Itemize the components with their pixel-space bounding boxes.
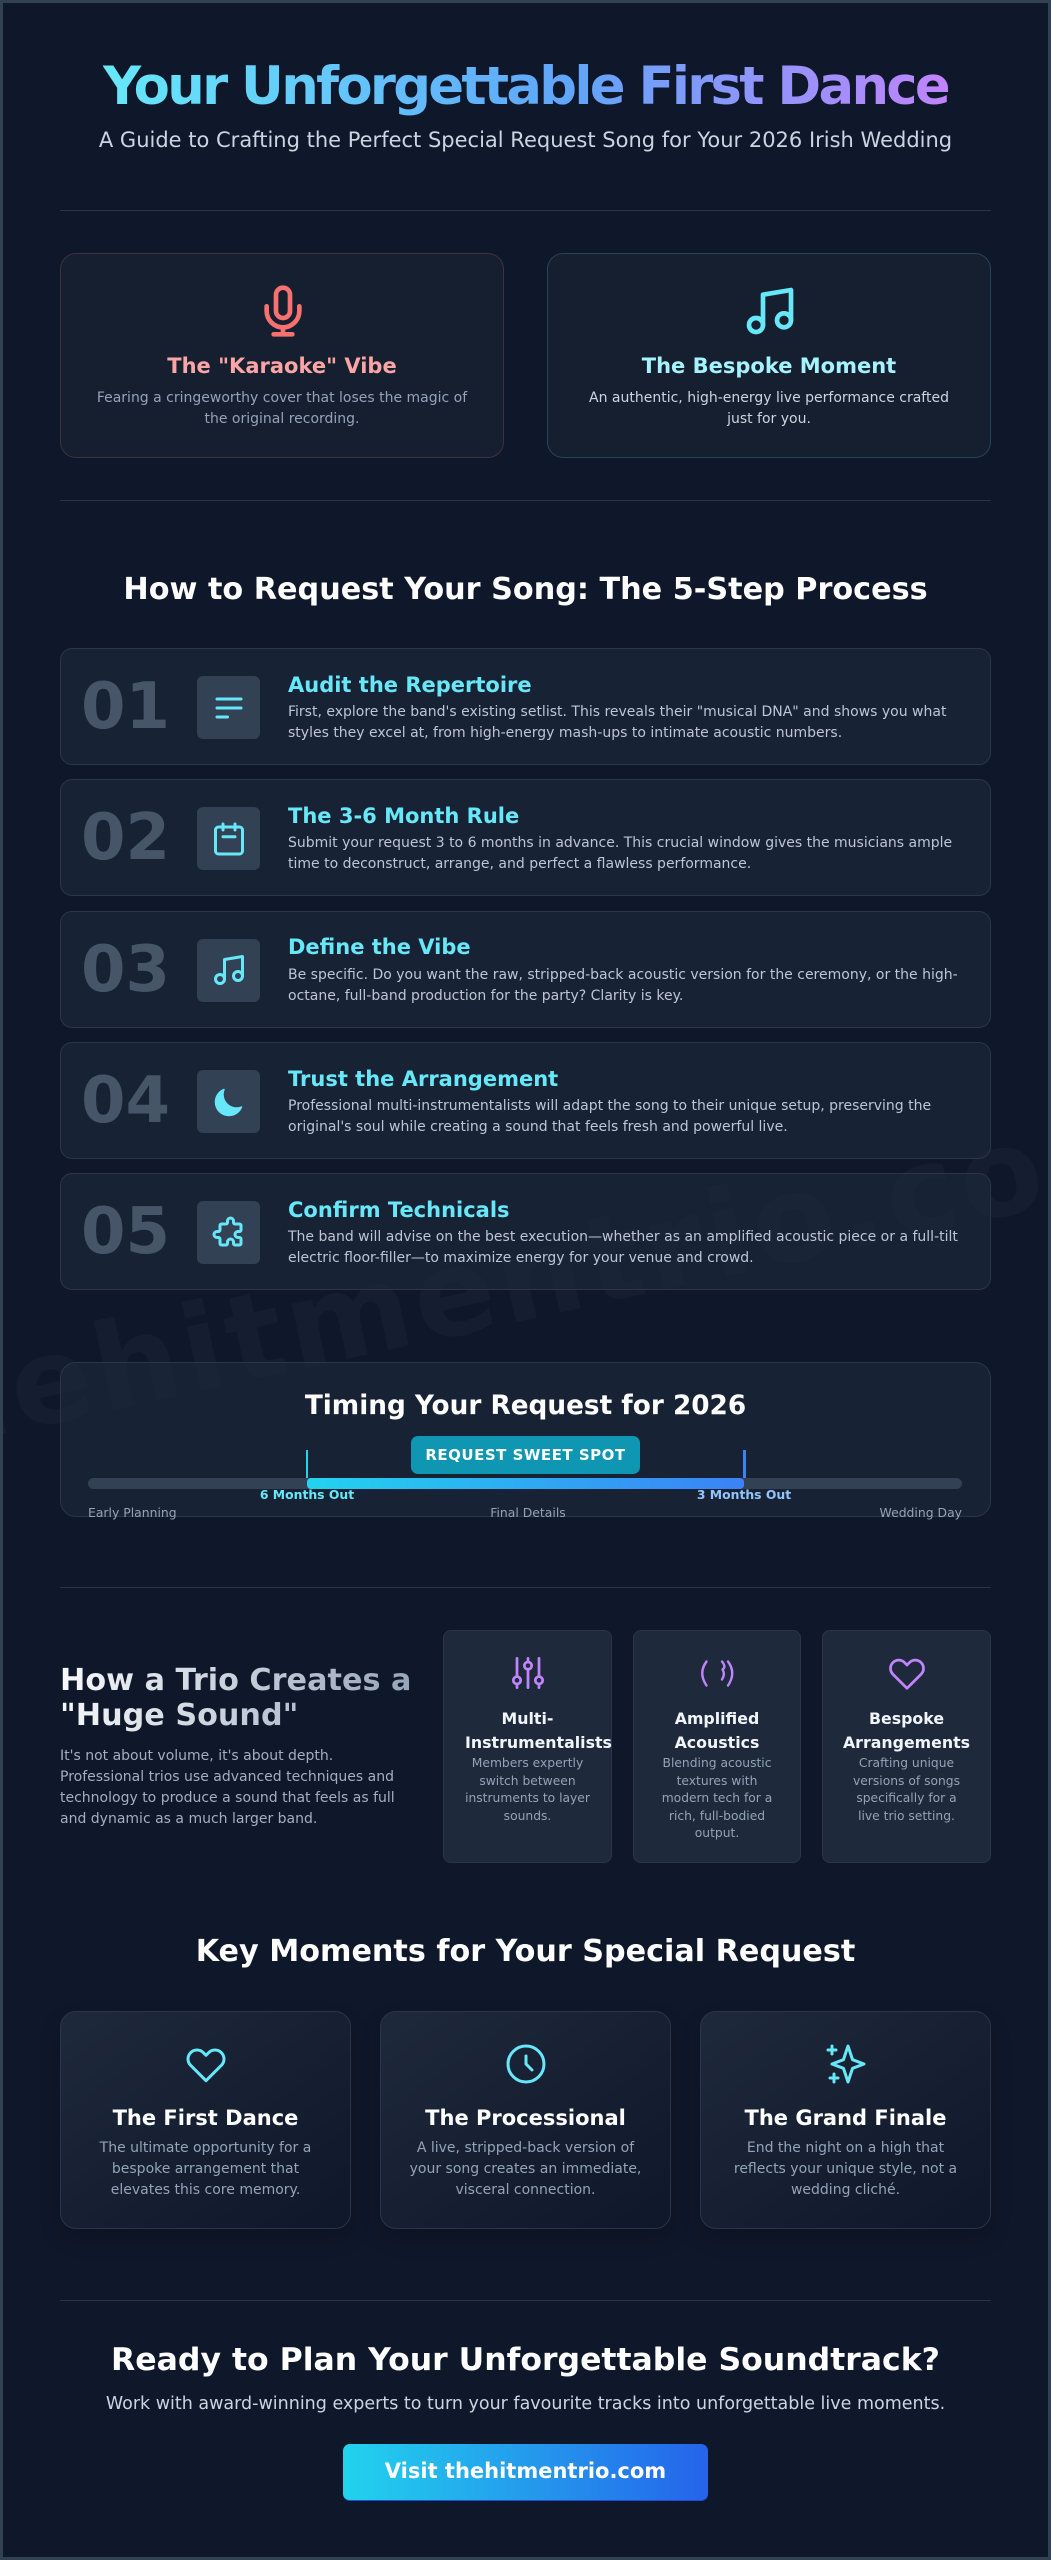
step text	[288, 967, 958, 1004]
heading: key moments: Key Moments for Your Special Request	[196, 1934, 855, 1969]
trio intro text: technology to produce a sound that feels as full	[60, 1790, 395, 1806]
3 months label: 3 Months Out	[697, 1487, 791, 1502]
trio intro text	[60, 1748, 395, 1827]
icon: heart	[186, 2048, 226, 2082]
heading: huge sound	[60, 1663, 411, 1734]
icon: list	[197, 676, 260, 739]
final details label: Final Details	[490, 1505, 566, 1520]
card text: your song creates an immediate,	[410, 2160, 641, 2176]
step text: First, explore the band's existing setlist. This reveals their "musical DNA" and shows you what	[288, 704, 946, 720]
card text: Members expertly	[472, 1756, 583, 1770]
card heading: The First Dance	[113, 2106, 298, 2130]
card heading: Acoustics	[675, 1733, 759, 1752]
panel: amplified acoustics	[633, 1630, 801, 1863]
step text: Submit your request 3 to 6 months in advance. This crucial window gives the musicians ample	[288, 835, 952, 851]
call to action button	[343, 2444, 708, 2501]
card text: An authentic, high-energy live performance crafted	[589, 390, 949, 406]
card text	[589, 390, 949, 427]
card text: just for you.	[727, 411, 811, 427]
wedding day label: Wedding Day	[880, 1505, 962, 1520]
card text: output.	[695, 1826, 739, 1840]
panel: timing timeline	[60, 1362, 991, 1517]
step text: time to deconstruct, arrange, and perfect a flawless performance.	[288, 856, 751, 872]
step text: styles they excel at, from high-energy mash-ups to intimate acoustic numbers.	[288, 725, 842, 741]
step heading: Audit the Repertoire	[288, 672, 532, 696]
title: Your Unforgettable First Dance	[103, 56, 948, 117]
step 5	[60, 1173, 991, 1290]
call to action heading: Ready to Plan Your Unforgettable Soundtrack?	[111, 2342, 940, 2378]
card text	[465, 1756, 590, 1822]
card text	[662, 1756, 772, 1840]
step heading: Define the Vibe	[288, 935, 471, 959]
step number: 01	[81, 670, 170, 744]
early planning label: Early Planning	[88, 1505, 177, 1520]
step text	[288, 835, 952, 872]
card heading	[465, 1708, 612, 1752]
card text: reflects your unique style, not a	[734, 2160, 957, 2176]
step number: 02	[81, 801, 170, 875]
card heading	[843, 1708, 970, 1752]
heading: huge sound: How a Trio Creates a	[60, 1663, 411, 1698]
trio intro text: and dynamic as a much larger band.	[60, 1811, 317, 1827]
card text: elevates this core memory.	[111, 2182, 300, 2198]
step number: 05	[81, 1195, 170, 1269]
card heading: The "Karaoke" Vibe	[167, 354, 397, 378]
card text: modern tech for a	[662, 1791, 772, 1805]
card text: bespoke arrangement that	[112, 2160, 299, 2176]
step text: octane, full-band production for the party? Clarity is key.	[288, 988, 683, 1004]
step text	[288, 1098, 931, 1135]
icon: heart	[889, 1658, 925, 1690]
call to action text: Work with award-winning experts to turn your favourite tracks into unforgettable live moments.	[106, 2394, 945, 2414]
panel: the karaoke vibe	[60, 253, 504, 458]
step heading: Trust the Arrangement	[288, 1066, 558, 1090]
icon: clock	[506, 2044, 546, 2084]
card text	[100, 2140, 311, 2198]
step text: The band will advise on the best execution—whether as an amplified acoustic piece or a full-tilt	[288, 1229, 958, 1245]
card text: instruments to layer	[465, 1791, 590, 1805]
card text: Crafting unique	[859, 1756, 954, 1770]
step text: Professional multi-instrumentalists will adapt the song to their unique setup, preserving the	[288, 1098, 931, 1114]
panel: processional	[380, 2011, 671, 2229]
sweet spot badge	[411, 1436, 640, 1474]
step 4	[60, 1042, 991, 1159]
icon: moon	[197, 1070, 260, 1133]
card text	[97, 390, 468, 427]
card heading: The Grand Finale	[744, 2106, 946, 2130]
card text: wedding cliché.	[791, 2182, 900, 2198]
card heading: Bespoke	[869, 1708, 944, 1728]
card text: The ultimate opportunity for a	[100, 2140, 311, 2156]
panel: multi-instrumentalists	[443, 1630, 612, 1863]
card text: textures with	[677, 1774, 757, 1788]
card heading: Amplified	[675, 1708, 759, 1728]
card text: rich, full-bodied	[669, 1808, 765, 1822]
icon: calendar	[197, 807, 260, 870]
step number: 03	[81, 933, 170, 1007]
icon: puzzle piece	[197, 1201, 260, 1264]
card text	[853, 1756, 960, 1822]
card text: A live, stripped-back version of	[417, 2140, 634, 2156]
card text: specifically for a	[856, 1791, 957, 1805]
heading: huge sound: "Huge Sound"	[60, 1698, 298, 1733]
subtitle: A Guide to Crafting the Perfect Special Request Song for Your 2026 Irish Wedding	[99, 128, 952, 152]
timeline heading: Timing Your Request for 2026	[305, 1391, 746, 1421]
card text: Blending acoustic	[663, 1756, 771, 1770]
icon: microphone	[264, 285, 302, 337]
icon: sliders	[512, 1657, 544, 1689]
card text: versions of songs	[853, 1774, 960, 1788]
card heading: The Bespoke Moment	[642, 354, 896, 378]
card text	[734, 2140, 957, 2198]
6 months label: 6 Months Out	[260, 1487, 354, 1502]
panel: grand finale	[700, 2011, 991, 2229]
card text: the original recording.	[204, 411, 360, 427]
step 1	[60, 648, 991, 765]
trio intro text: It's not about volume, it's about depth.	[60, 1748, 333, 1764]
timeline chart	[88, 1436, 962, 1520]
step text: original's soul while creating a sound that feels fresh and powerful live.	[288, 1119, 788, 1135]
card heading: Arrangements	[843, 1733, 970, 1752]
panel: first dance	[60, 2011, 351, 2229]
icon: music note	[746, 288, 794, 334]
track	[88, 1478, 962, 1489]
step text: electric floor-filler—to maximize energy for your venue and crowd.	[288, 1250, 754, 1266]
card text: live trio setting.	[858, 1808, 955, 1822]
icon: sound waves	[701, 1660, 734, 1687]
6 month marker	[306, 1450, 308, 1478]
panel: bespoke arrangements	[822, 1630, 991, 1863]
step heading: The 3-6 Month Rule	[288, 804, 519, 828]
card heading: Instrumentalists	[465, 1733, 612, 1752]
card heading: Multi-	[502, 1708, 553, 1728]
sweet spot range	[307, 1478, 744, 1489]
step number: 04	[81, 1064, 170, 1138]
card text: visceral connection.	[455, 2182, 596, 2198]
panel: the bespoke moment	[547, 253, 991, 458]
card text: sounds.	[504, 1808, 551, 1822]
card heading	[674, 1708, 759, 1752]
icon: music note	[197, 939, 260, 1002]
heading: 5-step process: How to Request Your Song: The 5-Step Process	[123, 572, 928, 606]
3 month marker	[743, 1450, 746, 1478]
step text	[288, 704, 946, 741]
step text: Be specific. Do you want the raw, stripped-back acoustic version for the ceremony, or the high-	[288, 967, 958, 983]
card text	[410, 2140, 641, 2198]
icon: sparkles	[826, 2044, 866, 2084]
step 2	[60, 779, 991, 896]
step 3	[60, 911, 991, 1028]
card text: Fearing a cringeworthy cover that loses the magic of	[97, 390, 467, 406]
step text	[288, 1229, 958, 1266]
call to action button: Visit thehitmentrio.com	[385, 2459, 666, 2483]
trio intro text: Professional trios use advanced techniques and	[60, 1769, 394, 1785]
sweet spot badge: REQUEST SWEET SPOT	[425, 1446, 626, 1464]
step heading: Confirm Technicals	[288, 1198, 510, 1222]
card text: switch between	[479, 1774, 576, 1788]
card text: End the night on a high that	[747, 2140, 944, 2156]
card heading: The Processional	[425, 2106, 626, 2130]
